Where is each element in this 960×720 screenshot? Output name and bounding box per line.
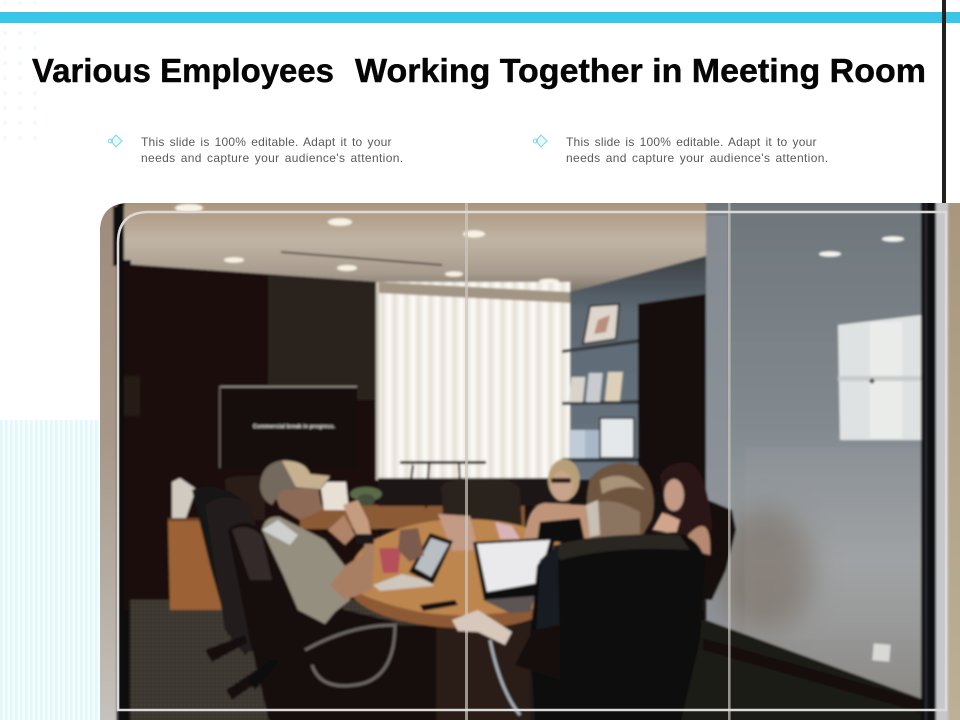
wall keypad — [124, 376, 140, 416]
table pedestal — [436, 622, 530, 720]
dark base behind room — [100, 203, 708, 720]
red cup — [379, 548, 401, 573]
ceiling light reflections on glass — [819, 236, 904, 257]
blue side wall — [570, 256, 706, 480]
photo: meeting room — [100, 203, 960, 720]
text block left: This slide is 100% editable. Adapt it to your — [141, 135, 392, 149]
right wall strips — [936, 198, 948, 720]
glass vertical reflection line left — [465, 203, 468, 720]
shelf lower with picture — [562, 418, 638, 462]
ceiling — [112, 198, 712, 292]
black right frame — [921, 198, 937, 720]
bullet icon: diamond right — [533, 134, 548, 148]
glass vertical reflection line right — [728, 203, 731, 720]
chrome chair arm — [490, 640, 520, 715]
black window post left — [113, 206, 124, 266]
framed photo on credenza — [320, 482, 349, 510]
round meeting table — [351, 519, 579, 628]
wall tv — [219, 386, 357, 468]
wall tv: Commercial break in progress. — [253, 424, 336, 430]
front chair — [530, 532, 705, 720]
man in cap — [260, 460, 375, 624]
phone on table — [420, 600, 458, 611]
decorative striped panel — [0, 420, 100, 720]
text block left — [141, 135, 403, 165]
baseboard — [703, 638, 925, 714]
top accent bar — [0, 12, 960, 23]
photo frame outline — [118, 212, 946, 710]
back apple laptop — [438, 514, 478, 551]
back credenza — [300, 505, 525, 529]
dark back wall — [124, 264, 378, 610]
high table behind window — [400, 461, 486, 508]
textured wall panel — [268, 275, 376, 400]
front woman — [586, 463, 654, 540]
back office chair — [441, 480, 523, 526]
text block right: This slide is 100% editable. Adapt it to your — [566, 135, 817, 149]
front woman arm and hand — [452, 610, 560, 680]
lower glass pane — [745, 447, 922, 640]
title: Working Together in Meeting Room — [355, 53, 926, 90]
bullet icon: diamond left — [108, 134, 123, 148]
dark doorway — [638, 294, 706, 490]
left wall strip — [100, 204, 120, 720]
glass wall panel — [706, 198, 924, 703]
title — [32, 53, 926, 90]
ceiling lights — [175, 204, 559, 283]
shadow under near chair — [342, 624, 436, 720]
shelf upper with picture — [562, 304, 638, 353]
back pink laptop — [495, 522, 520, 539]
snack pile — [398, 528, 424, 562]
floor — [130, 600, 440, 720]
centre laptop — [373, 533, 453, 591]
dark haired woman — [652, 462, 736, 600]
shelf middle with booklets — [562, 372, 638, 405]
text block right: needs and capture your audience's attention. — [566, 151, 828, 165]
whiteboard — [838, 315, 921, 440]
blonde woman — [522, 459, 592, 542]
sofa back — [225, 476, 265, 520]
title: Various Employees — [32, 53, 334, 90]
text block left: needs and capture your audience's attention. — [141, 151, 403, 165]
big laptop — [473, 537, 556, 613]
window with vertical blinds — [376, 282, 570, 480]
middle left chair — [206, 498, 259, 700]
text block right — [566, 135, 828, 165]
wood cabinet — [168, 478, 228, 610]
vertical black line — [942, 0, 946, 204]
near left chair — [228, 523, 400, 720]
wall outlet — [872, 643, 891, 662]
decorative dot pattern — [3, 1, 37, 140]
ceiling vent — [281, 251, 442, 266]
brown reflection on glass — [717, 508, 813, 632]
plant — [350, 487, 382, 506]
far left chair — [191, 486, 240, 602]
low dark sill — [378, 478, 570, 506]
